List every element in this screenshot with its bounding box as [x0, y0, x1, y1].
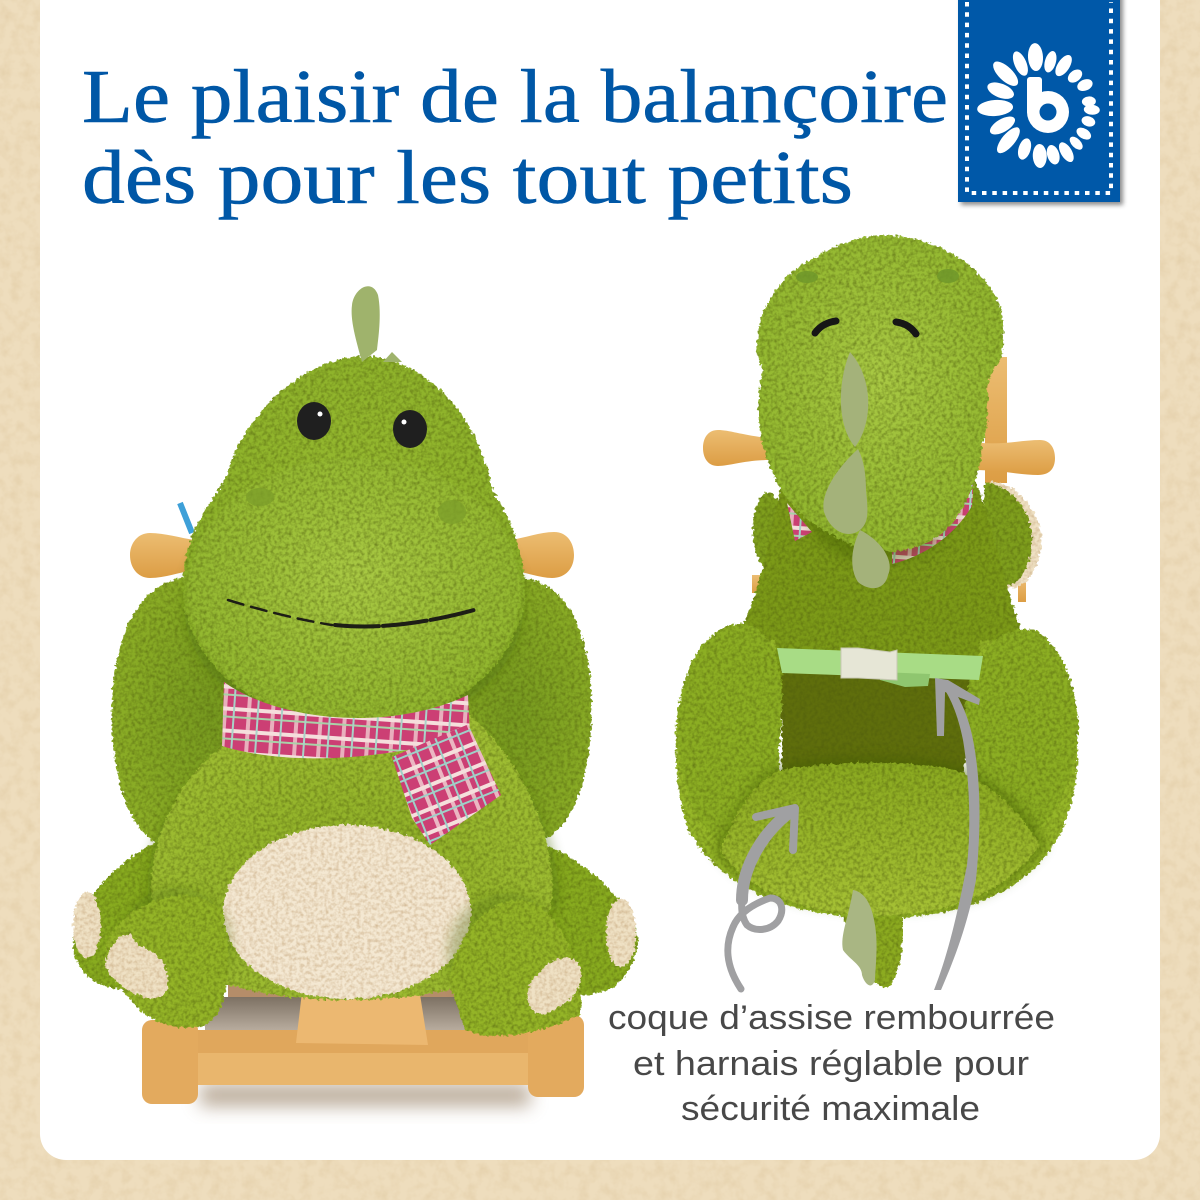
eyes: [815, 321, 916, 334]
head from behind: [757, 235, 1003, 552]
tail: [842, 915, 903, 988]
belly: [223, 825, 471, 999]
right paw: [980, 482, 1032, 585]
dino seat, top view: [676, 235, 1078, 990]
caption line 3: sécurité maximale: [681, 1090, 980, 1128]
back scarf: [787, 472, 974, 564]
arrow: seat shell: [728, 808, 795, 989]
head spikes: [823, 352, 890, 588]
head: [183, 356, 525, 726]
front feet: [105, 896, 581, 1036]
nostrils: [246, 488, 466, 524]
front paw pads: [106, 934, 581, 1014]
cushion shadow: [714, 758, 1046, 910]
back feet: [73, 840, 638, 995]
caption: [608, 999, 1055, 1128]
head shadow: [802, 425, 958, 565]
left paw: [753, 492, 783, 568]
icon: flower b: [977, 43, 1100, 168]
stitches: [796, 269, 959, 283]
rocker base: [142, 975, 584, 1106]
title: [82, 55, 948, 220]
title line 1: Le plaisir de la balançoire: [82, 55, 948, 139]
feet shadow: [119, 887, 564, 1017]
torso shadow: [147, 740, 560, 910]
logo badge: [958, 0, 1120, 202]
scarf: [222, 682, 501, 845]
inner back: [782, 672, 983, 775]
caption line 2: et harnais réglable pour: [633, 1045, 1029, 1083]
arrow: harness: [934, 678, 980, 990]
seat arms: [112, 577, 592, 850]
tag: [180, 503, 192, 533]
title line 2: dès pour les tout petits: [82, 136, 853, 220]
spike: [352, 286, 402, 362]
buckle: [841, 648, 897, 680]
right arm: [965, 629, 1078, 835]
torso: [151, 715, 552, 1000]
shell: [676, 640, 1078, 918]
plush shell: [676, 476, 1078, 988]
harness belt: [777, 648, 983, 687]
right paw lining: [985, 482, 1042, 588]
bar and post: [703, 357, 1055, 602]
caption line 1: coque d’assise rembourrée: [608, 999, 1055, 1037]
mouth: [228, 600, 474, 627]
plush body: [73, 577, 638, 995]
rocking dino, front view: [73, 286, 638, 1106]
back rest: [735, 476, 1030, 700]
head shadow: [184, 477, 524, 733]
back paw pads: [73, 892, 636, 967]
handles: [130, 532, 574, 578]
left arm: [678, 624, 782, 845]
eyes: [297, 402, 427, 448]
seat cushion: [720, 763, 1040, 915]
tail spike: [842, 890, 877, 985]
